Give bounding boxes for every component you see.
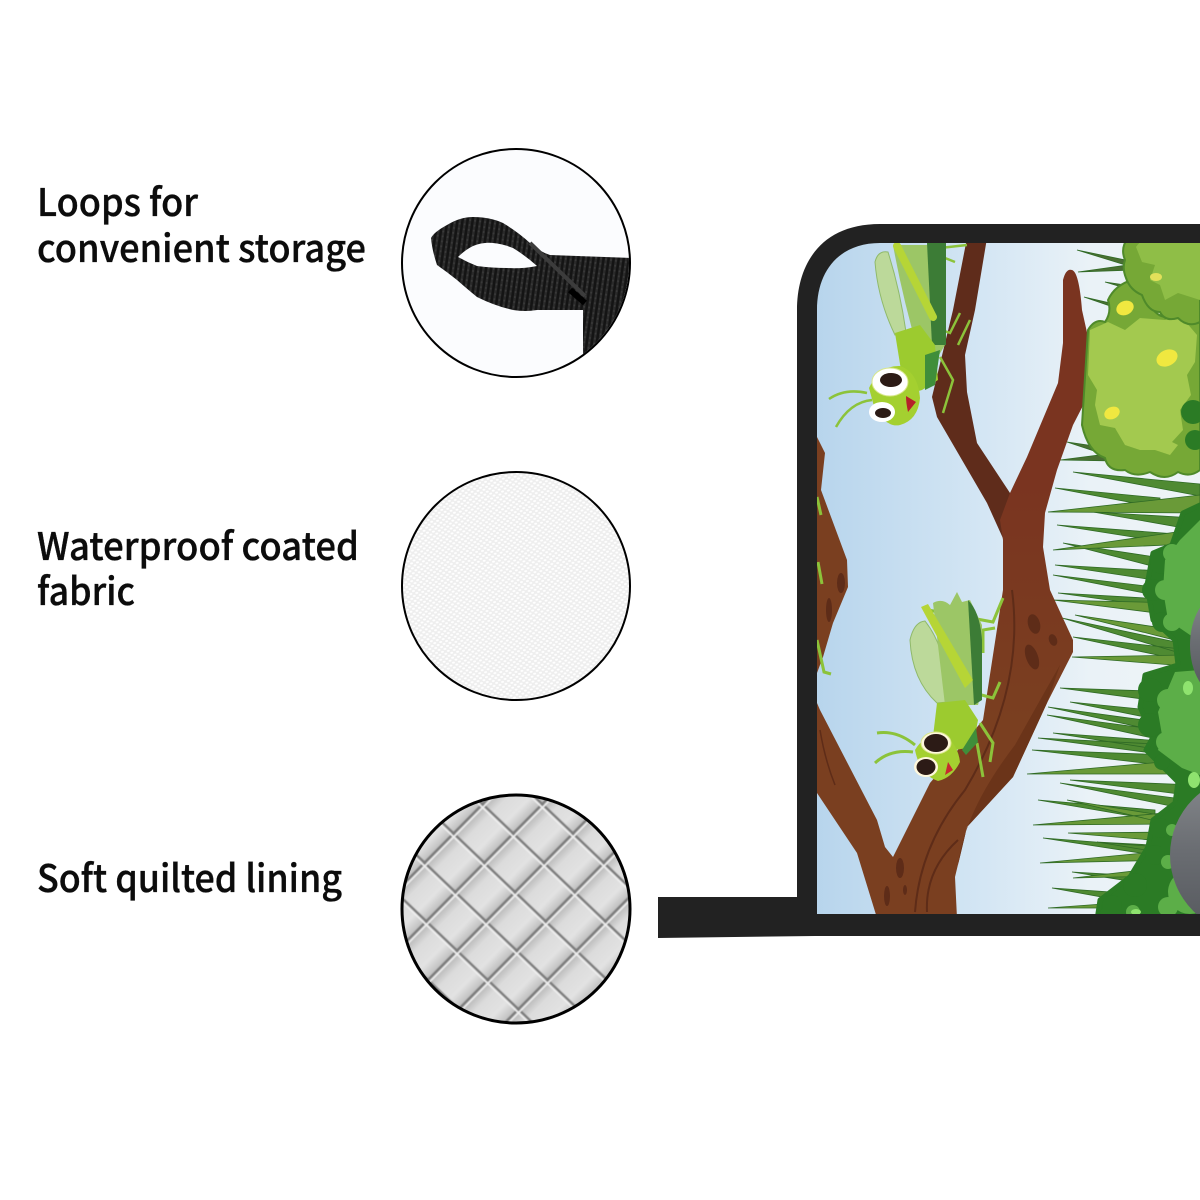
grass spikes <box>1027 250 1200 908</box>
upper left branch <box>932 238 1010 545</box>
circle: hanging loop detail <box>402 149 632 380</box>
pot holder product <box>658 224 1200 938</box>
infographic canvas <box>38 148 1200 1024</box>
caption: loops for convenient storage: convenient storage <box>37 218 366 273</box>
feature: waterproof <box>37 472 630 700</box>
grasshopper: lower <box>875 592 1003 781</box>
caption: waterproof coated fabric: Waterproof coated <box>37 516 359 571</box>
light green bush <box>1082 238 1200 477</box>
circle: coated fabric texture <box>402 472 630 700</box>
sky background <box>808 236 1200 920</box>
feature: loops <box>37 149 632 380</box>
caption: waterproof coated fabric <box>37 516 359 616</box>
caption: waterproof coated fabric: fabric <box>37 561 135 616</box>
caption: loops for convenient storage: Loops for <box>37 172 198 227</box>
feature: quilted lining <box>37 793 632 1025</box>
grasshopper: upper <box>829 243 970 427</box>
upper bush <box>1123 238 1200 324</box>
grasshopper: partial leg at left edge <box>817 497 831 674</box>
black binding frame <box>658 224 1200 938</box>
far left branch <box>817 437 848 673</box>
grey rocks <box>1170 595 1200 934</box>
caption: loops for convenient storage <box>37 172 366 273</box>
circle: quilted lining texture <box>400 793 632 1025</box>
trunk and main branch <box>817 270 1092 918</box>
printed artwork <box>808 236 1200 934</box>
dark green bush <box>1097 400 1200 920</box>
caption: soft quilted lining: Soft quilted lining <box>37 848 342 903</box>
tree branches <box>808 238 1092 918</box>
